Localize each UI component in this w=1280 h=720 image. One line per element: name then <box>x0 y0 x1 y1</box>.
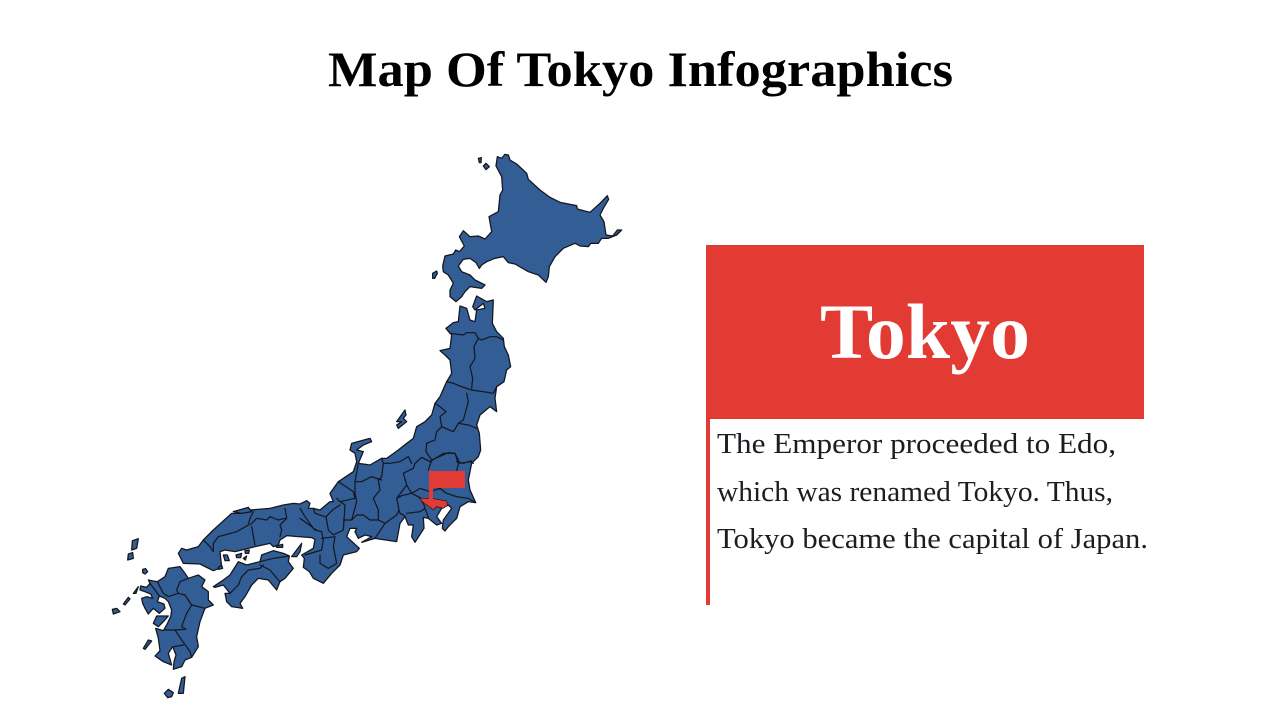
icon: red flag marker on Tokyo <box>429 471 465 502</box>
body text: which was renamed Tokyo. Thus, <box>717 477 1113 508</box>
red vertical accent bar <box>706 419 710 605</box>
body text: Tokyo became the capital of Japan. <box>717 524 1148 555</box>
Shikoku and Inland Sea islands <box>213 507 302 608</box>
heading: Tokyo: Tokyo <box>820 288 1030 375</box>
Sado island <box>397 410 407 428</box>
body text <box>717 429 1148 555</box>
map of Japan <box>112 154 622 698</box>
Kyushu and southwestern islands <box>112 539 213 698</box>
Hokkaido <box>433 154 622 302</box>
title: Map Of Tokyo Infographics <box>328 41 953 97</box>
panel: Tokyo description <box>706 245 1148 605</box>
Honshu <box>178 296 511 583</box>
red heading box <box>706 245 1144 419</box>
Tokyo region highlighted in red <box>419 498 448 510</box>
body text: The Emperor proceeded to Edo, <box>717 429 1116 460</box>
